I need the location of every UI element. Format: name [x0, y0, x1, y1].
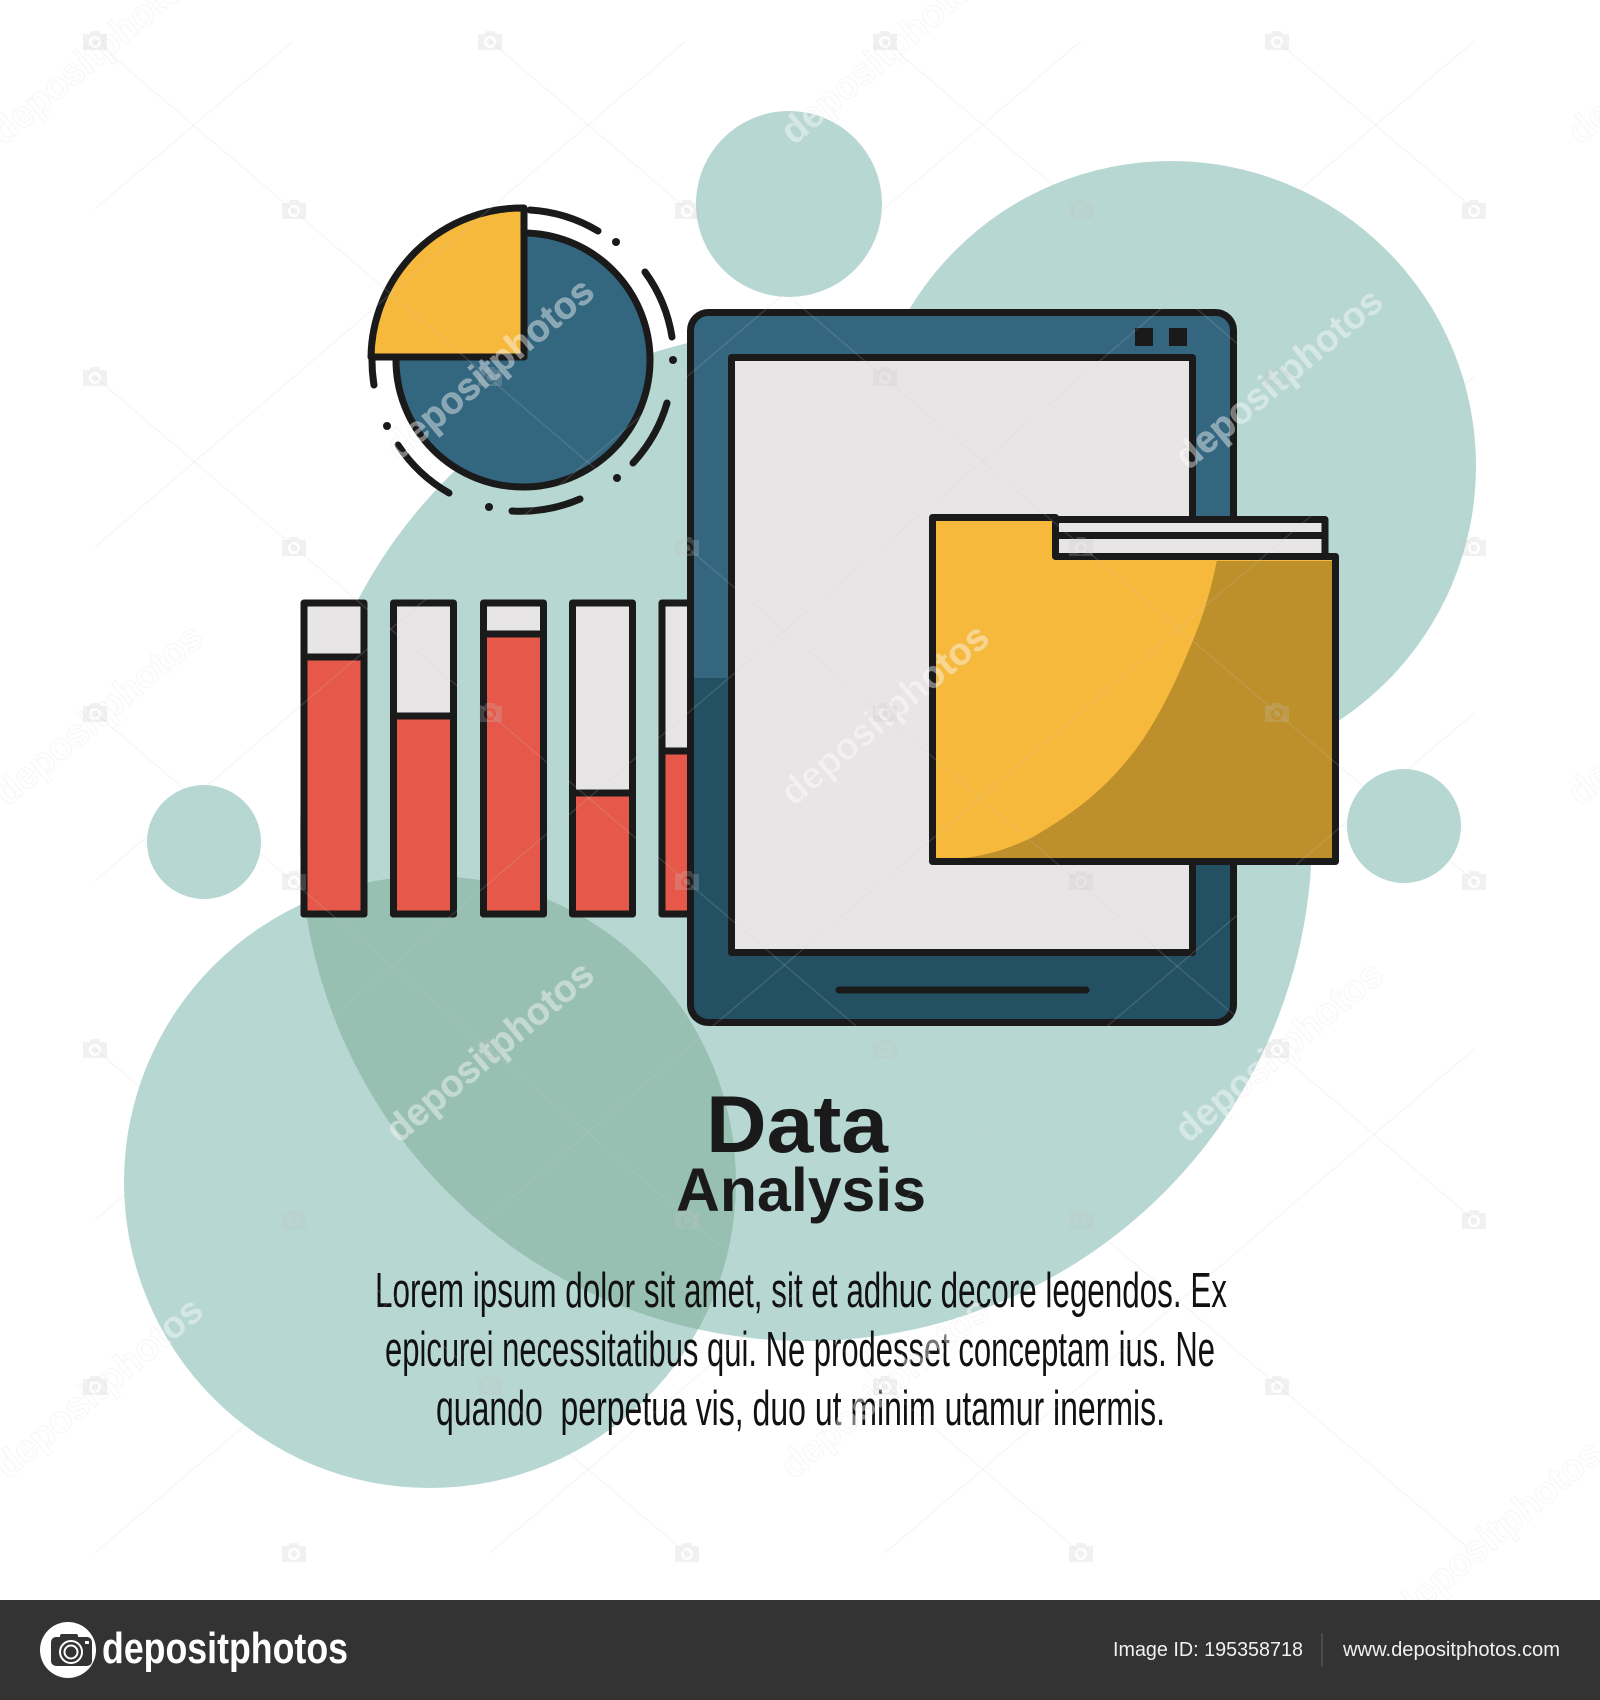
- bar 4: [572, 603, 632, 914]
- title: [676, 1080, 926, 1224]
- pie base: [396, 233, 650, 487]
- bar 2: [394, 603, 454, 914]
- title: Analysis: [676, 1156, 926, 1224]
- watermark text: depositphotos: [378, 953, 602, 1151]
- title: Data: [706, 1080, 889, 1170]
- tablet screen: [732, 358, 1192, 952]
- body text: quando perpetua vis, duo ut minim utamur inermis.: [436, 1382, 1165, 1436]
- background blobs: [124, 111, 1476, 1488]
- bar 3: [484, 603, 544, 914]
- body text: [375, 1264, 1227, 1436]
- watermark text: depositphotos: [378, 270, 602, 468]
- watermark text: depositphotos: [773, 616, 997, 814]
- bar 5: [658, 600, 687, 918]
- watermark lattice: [95, 41, 1474, 1553]
- folder papers: [1040, 520, 1325, 558]
- icon: camera logo: [40, 1622, 96, 1678]
- watermark text: depositphotos: [1167, 953, 1391, 1151]
- website: www.depositphotos.com: [1342, 1639, 1560, 1661]
- tablet body: [690, 312, 1234, 1024]
- image id: Image ID: 195358718: [1113, 1639, 1303, 1661]
- tablet: [690, 312, 1234, 1024]
- folder shadow: [965, 560, 1332, 858]
- logo wordmark: depositphotos: [102, 1624, 348, 1673]
- pie slice: [371, 208, 524, 357]
- folder: [932, 518, 1336, 862]
- tablet home bar: [839, 986, 1086, 994]
- footer divider: [1321, 1633, 1323, 1667]
- pie orbit dashes: [372, 210, 677, 511]
- pie chart: [371, 208, 677, 511]
- watermark text: depositphotos: [1167, 280, 1391, 478]
- bar 1: [304, 603, 364, 914]
- folder front: [932, 518, 1336, 862]
- tablet camera squares: [1135, 328, 1187, 346]
- watermark text: depositphotos: [773, 1289, 997, 1487]
- footer bar: [0, 1600, 1600, 1700]
- watermark camera icons: [83, 31, 1486, 1562]
- bar chart: [304, 603, 722, 914]
